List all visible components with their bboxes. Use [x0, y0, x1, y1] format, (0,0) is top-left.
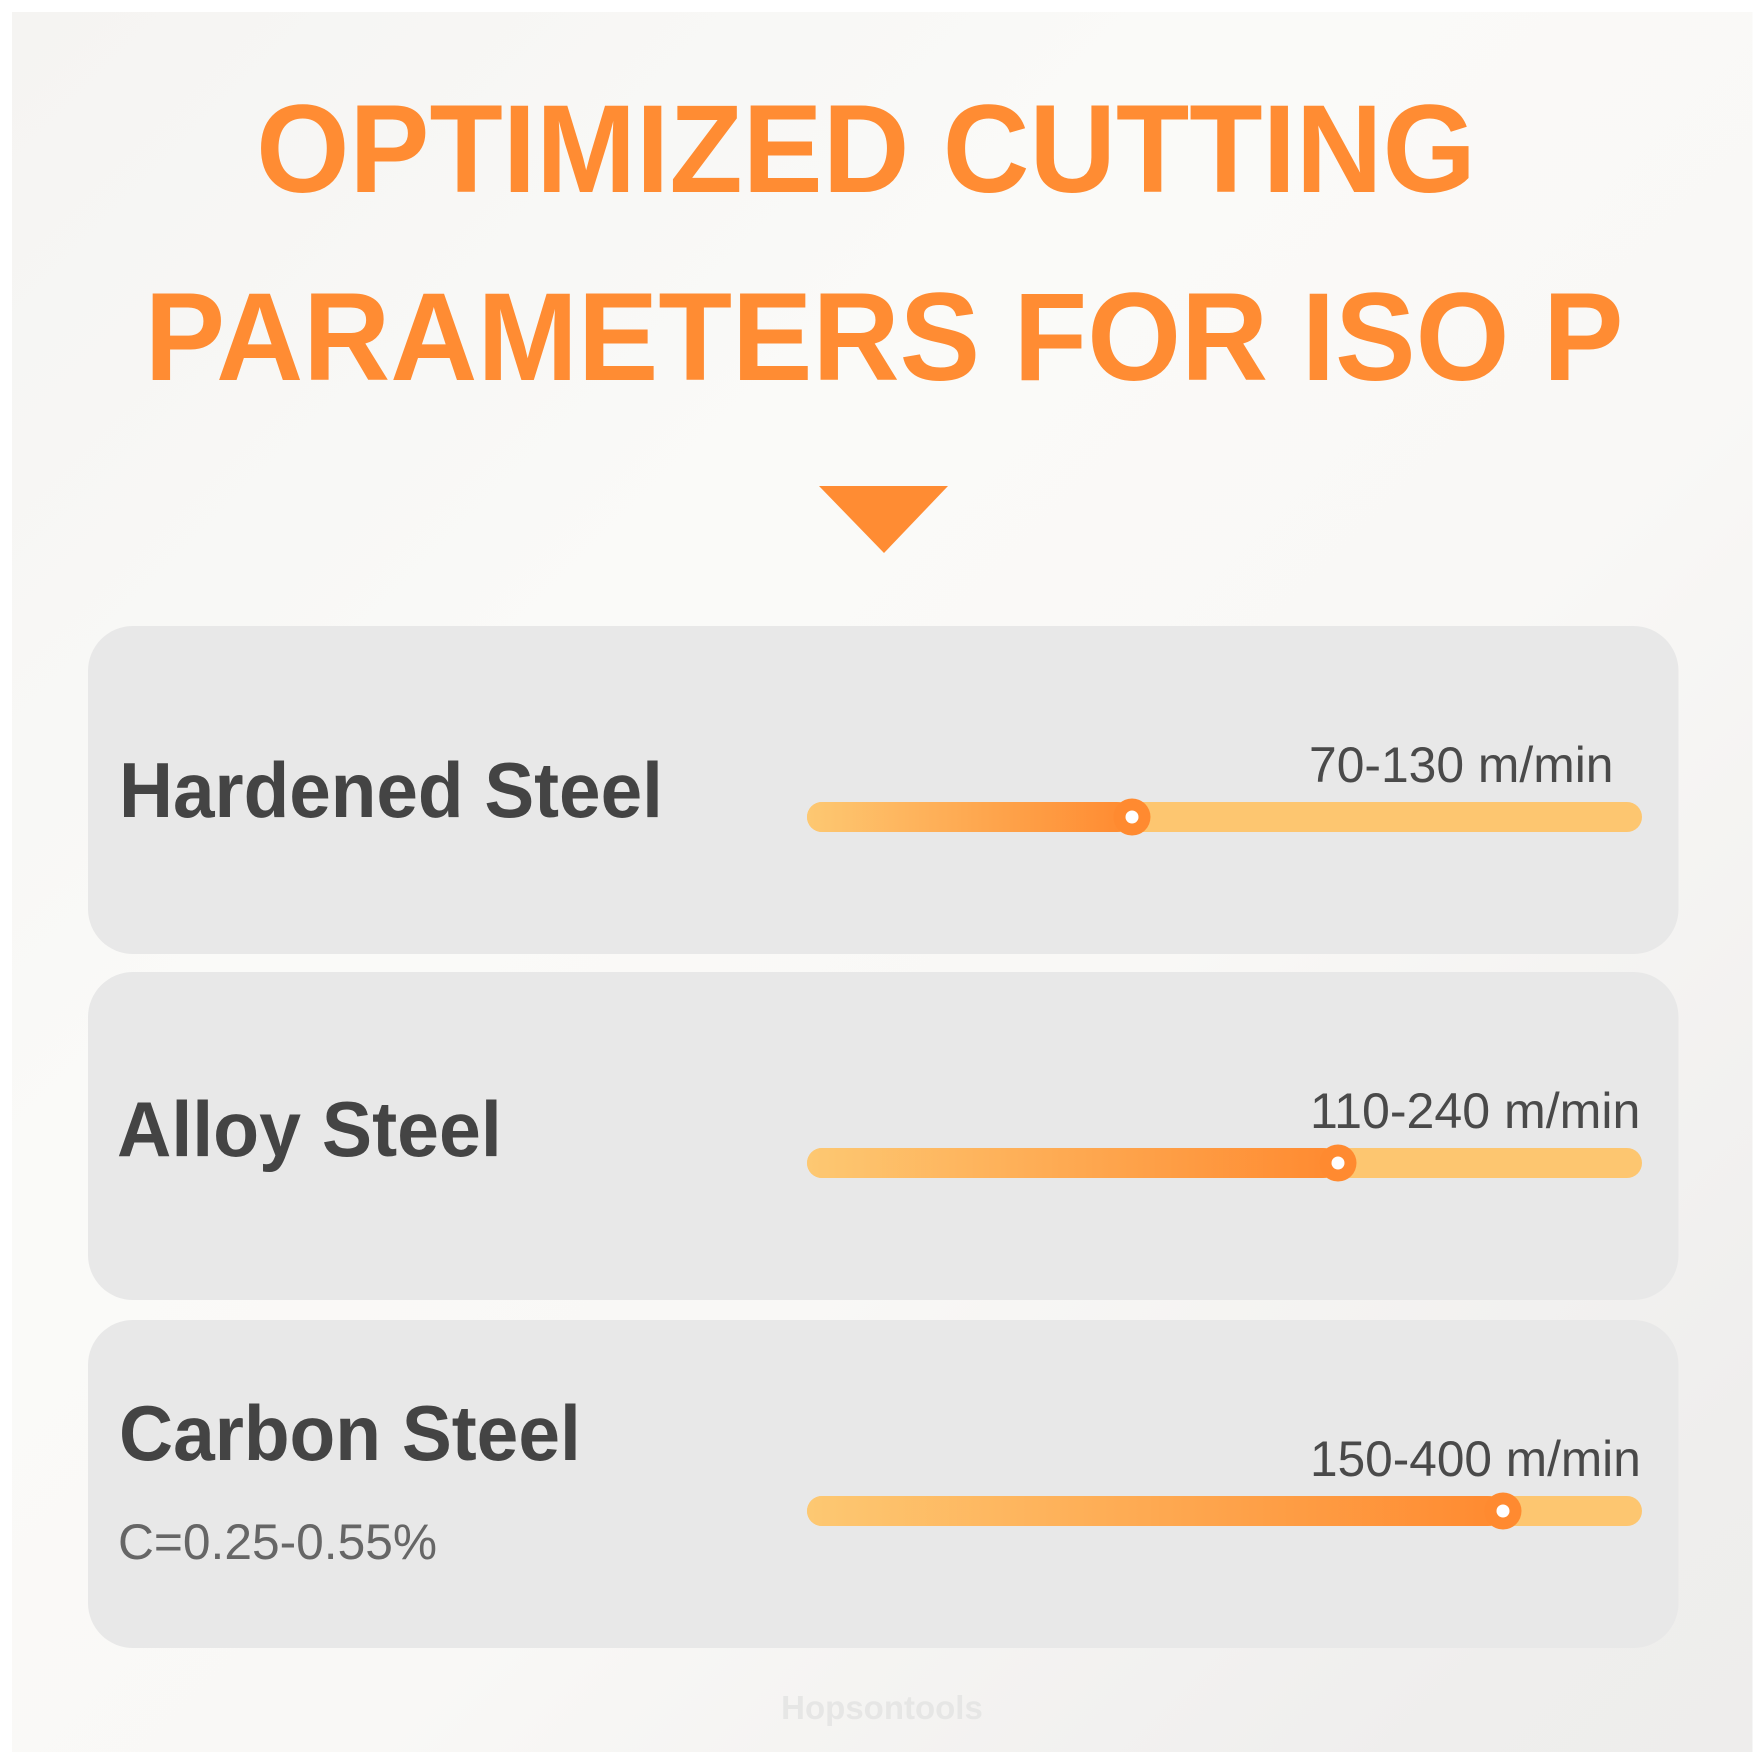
speed value: 110-240 m/min	[1310, 1083, 1640, 1139]
speed value: 70-130 m/min	[1309, 737, 1613, 793]
speed bar	[807, 1144, 1642, 1182]
panel: hardened steel	[88, 626, 1678, 954]
panel: alloy steel	[88, 972, 1678, 1300]
title: OPTIMIZED CUTTING	[256, 79, 1476, 219]
speed bar	[807, 1492, 1642, 1530]
material name: Alloy Steel	[117, 1087, 502, 1173]
carbon content note: C=0.25-0.55%	[118, 1514, 437, 1570]
panel: carbon steel	[88, 1320, 1678, 1648]
material name: Hardened Steel	[119, 748, 663, 834]
arrow: down triangle	[819, 486, 948, 553]
material name: Carbon Steel	[119, 1391, 581, 1477]
speed bar	[807, 798, 1642, 836]
title	[145, 79, 1623, 407]
watermark: Hopsontools	[781, 1689, 983, 1726]
title: PARAMETERS FOR ISO P	[145, 268, 1623, 407]
speed value: 150-400 m/min	[1310, 1431, 1641, 1487]
